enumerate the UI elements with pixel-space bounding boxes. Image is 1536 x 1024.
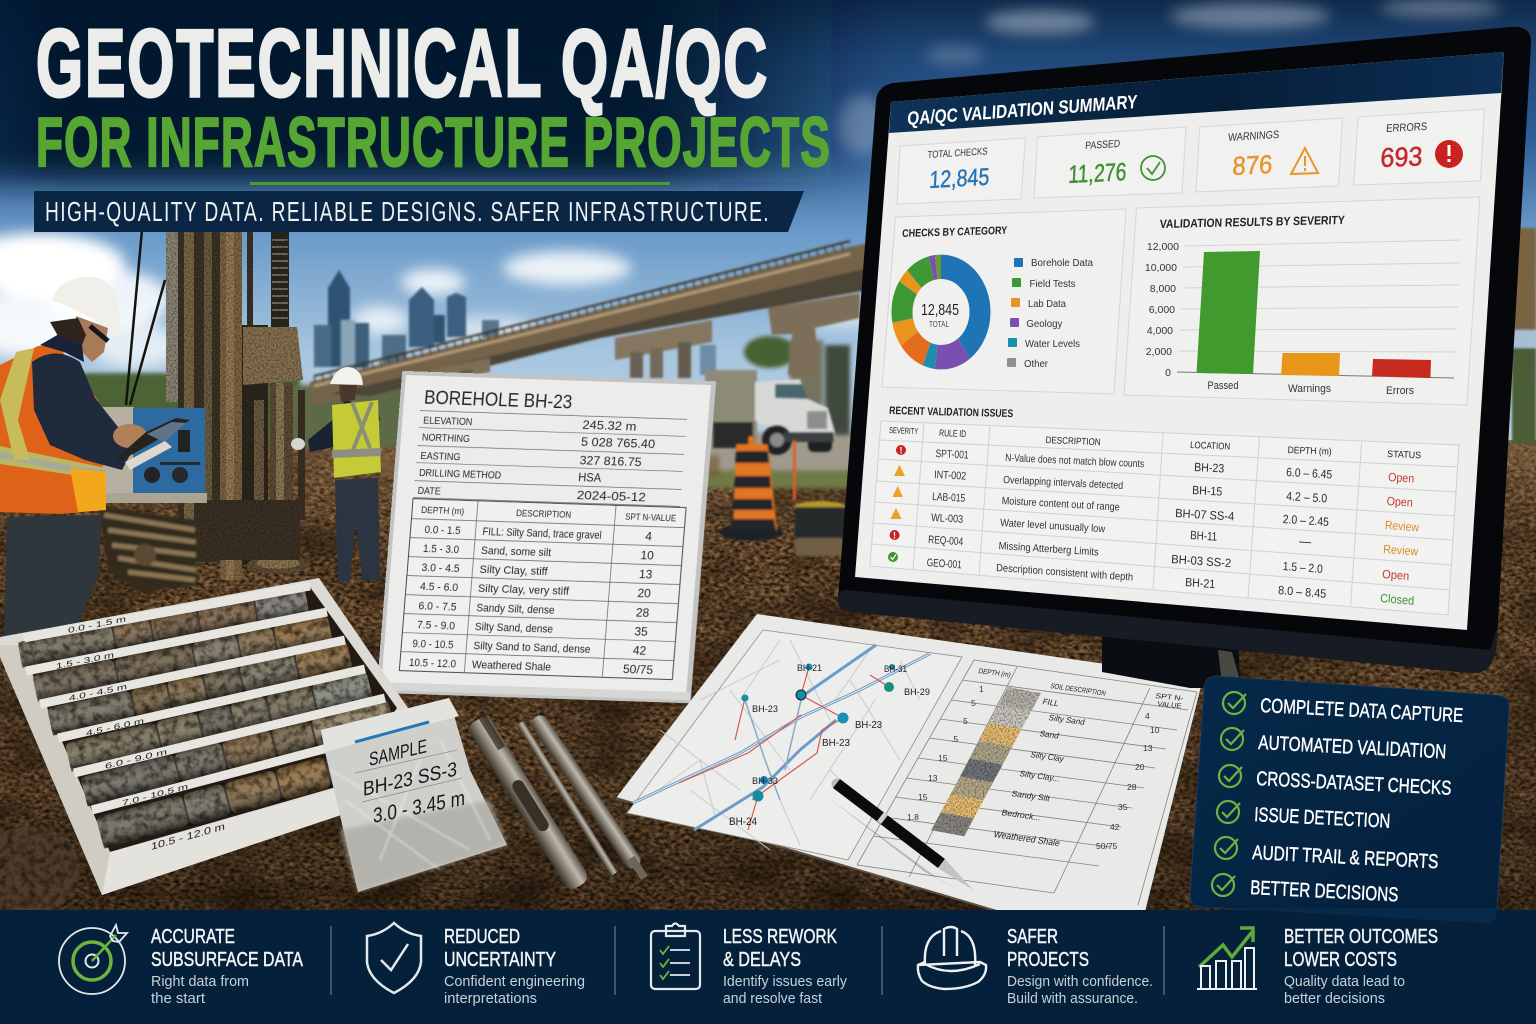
benefit: accurate subsurface data: Right data from bbox=[151, 973, 249, 990]
accent line bbox=[250, 182, 670, 185]
benefit: reduced uncertainty bbox=[367, 923, 585, 1007]
board metadata: EASTING bbox=[420, 450, 461, 463]
tray dividers with depth labels: 4.0 - 4.5 m bbox=[69, 682, 127, 703]
log sheet table: Sandy Silt bbox=[1010, 789, 1052, 803]
log sheet table: 4 bbox=[1145, 711, 1150, 721]
soil log table: 20 bbox=[637, 586, 652, 601]
soil log table bbox=[399, 499, 686, 680]
log sheet table: 10 bbox=[1150, 725, 1160, 735]
soil log table: 35 bbox=[634, 624, 649, 639]
site plan: BH-24 bbox=[729, 816, 757, 828]
benefit: less rework and delays bbox=[651, 924, 847, 1007]
site plan: BH-23 bbox=[855, 720, 882, 731]
benefit: accurate subsurface data: SUBSURFACE DATA bbox=[151, 949, 304, 971]
item: audit trail and reports: AUDIT TRAIL & REPORTS bbox=[1252, 842, 1439, 873]
locations: BH-03 SS-2 bbox=[1171, 552, 1232, 570]
whiteboard: borehole log bbox=[376, 371, 716, 703]
panel: validation results by severity: Errors bbox=[1386, 385, 1414, 397]
KPI card: passed: PASSED bbox=[1085, 138, 1121, 152]
soil log table: 9.0 - 10.5 bbox=[412, 638, 454, 651]
statuses: Open bbox=[1382, 567, 1410, 583]
soil log table: 7.5 - 9.0 bbox=[417, 619, 455, 632]
panel: checks by category: CHECKS BY CATEGORY bbox=[902, 225, 1008, 240]
KPI card: passed: 11,276 bbox=[1068, 158, 1127, 189]
title: FOR INFRASTRUCTURE PROJECTS bbox=[36, 103, 831, 181]
benefit: safer projects: Build with assurance. bbox=[1007, 990, 1138, 1007]
log sheet table: .5 bbox=[951, 734, 958, 744]
KPI card: warnings: 876 bbox=[1232, 149, 1273, 181]
item: issue detection bbox=[1217, 801, 1391, 833]
site map and log sheet bbox=[616, 614, 1203, 912]
board metadata: 2024-05-12 bbox=[576, 488, 647, 504]
rule ids: WL-003 bbox=[931, 512, 963, 526]
board metadata: 5 028 765.40 bbox=[580, 435, 656, 451]
axis labels: 8,000 bbox=[1150, 283, 1176, 295]
log sheet table: Silty Clay... bbox=[1018, 769, 1061, 784]
log sheet table: 1.8 bbox=[907, 812, 919, 822]
locations: BH-07 SS-4 bbox=[1175, 506, 1235, 524]
tablet bbox=[117, 418, 190, 470]
recent validation issues heading: RECENT VALIDATION ISSUES bbox=[889, 405, 1013, 420]
depths: — bbox=[1299, 534, 1313, 549]
crawler tracks bbox=[100, 507, 197, 592]
table header: LOCATION bbox=[1190, 440, 1231, 453]
screen bbox=[855, 52, 1504, 630]
monitor stand bbox=[1102, 630, 1240, 688]
tagline banner: HIGH-QUALITY DATA. RELIABLE DESIGNS. SAFER INFRASTRUCTURE. bbox=[45, 196, 770, 227]
descriptions: N-Value does not match blow counts bbox=[1005, 452, 1144, 470]
table header: SEVERITY bbox=[889, 425, 919, 436]
vest bbox=[0, 345, 106, 514]
donut chart bbox=[902, 267, 980, 357]
strata column bbox=[931, 687, 1041, 836]
board metadata: HSA bbox=[578, 470, 602, 485]
item: audit trail and reports bbox=[1215, 837, 1439, 873]
rig mast bbox=[166, 192, 309, 580]
neck and face bbox=[76, 316, 108, 362]
tray dividers with depth labels: 6.0 - 9.0 m bbox=[105, 747, 167, 771]
log sheet table: Silty Clay bbox=[1029, 750, 1066, 764]
depths: 6.0 – 6.45 bbox=[1286, 465, 1333, 482]
site plan: BH-29 bbox=[904, 687, 930, 697]
table header: STATUS bbox=[1387, 449, 1421, 461]
statuses: Closed bbox=[1380, 591, 1415, 608]
soil log table: Sandy Silt, dense bbox=[476, 602, 555, 617]
board metadata: 245.32 m bbox=[582, 418, 637, 434]
log sheet table: 15 bbox=[918, 792, 928, 802]
donut legend: Field Tests bbox=[1030, 278, 1076, 290]
benefit: better outcomes, lower costs: Quality data lead to bbox=[1284, 973, 1405, 990]
control box bbox=[98, 407, 207, 503]
title bbox=[36, 10, 831, 181]
benefit: safer projects: SAFER bbox=[1007, 926, 1058, 948]
tray dividers with depth labels: 7.0 - 10.5 m bbox=[122, 782, 188, 808]
site plan: BH-21 bbox=[797, 663, 822, 673]
soil log table: 42 bbox=[632, 643, 647, 658]
donut legend: Other bbox=[1024, 358, 1048, 370]
soil log table: 0.0 - 1.5 bbox=[424, 524, 461, 537]
locations: BH-11 bbox=[1190, 528, 1218, 544]
icon: hard hat bbox=[918, 927, 986, 989]
axis labels: 2,000 bbox=[1146, 346, 1172, 358]
title: GEOTECHNICAL QA/QC bbox=[36, 10, 769, 117]
locations bbox=[1171, 460, 1235, 591]
statuses: Review bbox=[1385, 518, 1420, 534]
soil log table: 13 bbox=[638, 567, 653, 582]
panel: checks by category: 12,845 bbox=[921, 302, 959, 319]
axis labels: 6,000 bbox=[1149, 304, 1175, 316]
benefit: better outcomes, lower costs: LOWER COSTS bbox=[1284, 949, 1397, 971]
locations: BH-15 bbox=[1192, 483, 1223, 499]
depths: 2.0 – 2.45 bbox=[1282, 512, 1329, 529]
item: better decisions: BETTER DECISIONS bbox=[1250, 877, 1399, 906]
log sheet table: VALUE bbox=[1157, 700, 1182, 710]
bridge bbox=[310, 228, 1536, 444]
tray dividers with depth labels: 0.0 - 1.5 m bbox=[68, 614, 126, 635]
soil log table: 10.5 - 12.0 bbox=[408, 657, 456, 670]
bars bbox=[1196, 251, 1260, 374]
sample bag bbox=[321, 698, 507, 892]
benefit: accurate subsurface data: ACCURATE bbox=[151, 926, 235, 948]
item: issue detection: ISSUE DETECTION bbox=[1254, 804, 1391, 833]
soil log table: SPT N-VALUE bbox=[625, 512, 677, 524]
descriptions: Description consistent with depth bbox=[996, 562, 1134, 584]
depths bbox=[1278, 465, 1333, 601]
soil log table: 4 bbox=[645, 529, 653, 544]
log sheet table: 35 bbox=[1118, 802, 1128, 812]
soil log table: Silty Sand, dense bbox=[475, 621, 553, 636]
background sky bbox=[0, 0, 1536, 470]
soil log table: Sand, some silt bbox=[481, 545, 552, 559]
soil log table: 10 bbox=[640, 548, 655, 563]
statuses bbox=[1380, 470, 1420, 608]
soil log table: Silty Clay, stiff bbox=[479, 564, 549, 578]
panel: checks by category bbox=[882, 209, 1126, 394]
log sheet table: SPT N- bbox=[1155, 692, 1185, 703]
soil log table: DEPTH (m) bbox=[421, 505, 465, 517]
table header bbox=[889, 425, 1421, 461]
locations: BH-21 bbox=[1185, 575, 1216, 591]
bezel bbox=[838, 27, 1531, 673]
rule ids: INT-002 bbox=[934, 469, 966, 483]
item: better decisions bbox=[1212, 874, 1399, 906]
benefit: reduced uncertainty: interpretations bbox=[444, 990, 537, 1007]
KPI card: warnings bbox=[1196, 118, 1342, 192]
descriptions: Missing Atterberg Limits bbox=[998, 540, 1099, 558]
item: cross-dataset checks bbox=[1219, 765, 1452, 800]
axis labels: 10,000 bbox=[1145, 262, 1177, 274]
icon: shield bbox=[367, 923, 421, 993]
table header: DEPTH (m) bbox=[1287, 445, 1332, 458]
benefit: less rework and delays: and resolve fast bbox=[723, 990, 823, 1007]
benefit: better outcomes, lower costs: BETTER OUTCOMES bbox=[1284, 926, 1438, 948]
descriptions: Overlapping intervals detected bbox=[1003, 474, 1124, 492]
KPI card: total checks: TOTAL CHECKS bbox=[927, 146, 988, 161]
table header: DESCRIPTION bbox=[1045, 435, 1101, 448]
benefit: reduced uncertainty: Confident engineering bbox=[444, 973, 585, 990]
footer bar bbox=[0, 907, 1536, 1024]
log sheet table: 5 bbox=[963, 716, 968, 726]
benefit: safer projects bbox=[918, 926, 1153, 1007]
trousers bbox=[4, 515, 102, 640]
axis labels: 12,000 bbox=[1147, 241, 1179, 253]
panel: validation results by severity: Passed bbox=[1208, 380, 1238, 392]
board title: BOREHOLE BH-23 bbox=[423, 388, 573, 414]
axis labels: 4,000 bbox=[1147, 325, 1173, 337]
panel: validation results by severity: Warnings bbox=[1288, 383, 1331, 395]
donut legend: Water Levels bbox=[1025, 338, 1080, 350]
soil log table: FILL: Silty Sand, trace gravel bbox=[482, 526, 602, 542]
log sheet table: DEPTH (m) bbox=[977, 667, 1012, 679]
sample bag: 3.0 - 3.45 m bbox=[373, 787, 465, 828]
board metadata: DRILLING METHOD bbox=[419, 467, 502, 481]
panel: validation results by severity bbox=[1124, 197, 1480, 405]
table header: RULE ID bbox=[939, 428, 966, 440]
tray dividers with depth labels: 1.5 - 3.0 m bbox=[56, 650, 114, 671]
KPI card: total checks: 12,845 bbox=[929, 164, 990, 194]
site plan: BH-31 bbox=[884, 664, 907, 674]
traffic cone bbox=[719, 436, 796, 541]
log sheet table: Silty Sand bbox=[1047, 713, 1086, 727]
monitor bbox=[838, 27, 1531, 673]
descriptions: Water level unusually low bbox=[1000, 517, 1106, 535]
header bar bbox=[889, 52, 1504, 133]
board metadata: ELEVATION bbox=[423, 415, 473, 428]
core rows bbox=[18, 588, 395, 848]
worker with tablet bbox=[0, 277, 190, 640]
soil log table: 28 bbox=[635, 605, 650, 620]
benefit: reduced uncertainty: UNCERTAINTY bbox=[444, 949, 556, 971]
donut legend: Geology bbox=[1026, 318, 1063, 330]
header bar: QA/QC VALIDATION SUMMARY bbox=[907, 92, 1138, 130]
board metadata bbox=[413, 411, 687, 506]
tray dividers with depth labels: 10.5 - 12.0 m bbox=[151, 821, 225, 853]
background worker bbox=[291, 367, 381, 583]
icon: clipboard checklist bbox=[651, 924, 700, 989]
soil log table: 4.5 - 6.0 bbox=[420, 581, 459, 594]
board metadata: NORTHING bbox=[421, 432, 470, 445]
benefit: accurate subsurface data bbox=[59, 925, 304, 1007]
soil log table: 6.0 - 7.5 bbox=[418, 600, 457, 613]
locations: BH-23 bbox=[1194, 460, 1225, 476]
sleeve bbox=[32, 354, 130, 470]
KPI card: passed bbox=[1034, 127, 1186, 198]
board metadata: 327 816.75 bbox=[579, 453, 642, 469]
log sheet table: 13 bbox=[928, 773, 938, 783]
hand bbox=[113, 424, 147, 448]
donut legend: Borehole Data bbox=[1031, 257, 1093, 269]
white helmet bbox=[52, 277, 122, 338]
skyline bbox=[314, 270, 716, 375]
log sheet table: 20 bbox=[1135, 762, 1145, 772]
drill rig bbox=[98, 192, 309, 592]
soil log table: 50/75 bbox=[622, 662, 654, 677]
sample bag: SAMPLE bbox=[369, 736, 427, 771]
KPI card: errors bbox=[1354, 109, 1484, 185]
hydraulic hose lines bbox=[126, 230, 165, 405]
site plan: BH-33 bbox=[752, 776, 778, 786]
log sheet table: SOIL DESCRIPTION bbox=[1049, 682, 1107, 698]
split spoon sampler tools bbox=[464, 711, 651, 892]
depths: 4.2 – 5.0 bbox=[1286, 489, 1328, 505]
descriptions bbox=[996, 452, 1144, 584]
bucket bbox=[794, 501, 846, 556]
KPI card: total checks bbox=[897, 138, 1026, 204]
tray dividers with depth labels bbox=[24, 586, 400, 853]
core tray bbox=[0, 578, 408, 895]
pen bbox=[826, 778, 973, 894]
log sheet table: 15 bbox=[938, 753, 948, 763]
log sheet table bbox=[857, 660, 1197, 905]
log sheet table: Weathered Shale bbox=[992, 829, 1061, 848]
soil log table: Weathered Shale bbox=[471, 659, 551, 674]
rule ids: SPT-001 bbox=[935, 448, 969, 462]
statuses: Open bbox=[1386, 494, 1413, 510]
soil log table: DESCRIPTION bbox=[516, 508, 572, 521]
axis labels bbox=[1145, 241, 1179, 379]
log sheet table: 13 bbox=[1143, 743, 1153, 753]
benefit: safer projects: PROJECTS bbox=[1007, 949, 1089, 971]
icon: rising bar chart bbox=[1197, 928, 1257, 989]
statuses: Review bbox=[1383, 542, 1419, 559]
axis labels: 0 bbox=[1165, 367, 1171, 379]
donut legend: Lab Data bbox=[1028, 298, 1066, 310]
item: complete data capture bbox=[1223, 692, 1464, 727]
rule ids bbox=[926, 448, 969, 571]
benefit: reduced uncertainty: REDUCED bbox=[444, 926, 520, 948]
log sheet table: Bedrock... bbox=[1000, 808, 1042, 822]
site plan: BH-23 bbox=[752, 704, 778, 714]
soil log table: Silty Clay, very stiff bbox=[478, 583, 570, 598]
rule ids: REQ-004 bbox=[928, 534, 963, 548]
site plan bbox=[627, 630, 962, 860]
truck bbox=[705, 370, 835, 455]
log sheet table: 5 bbox=[971, 698, 976, 708]
KPI card: errors: 693 bbox=[1380, 141, 1423, 173]
icon: target bbox=[59, 925, 127, 994]
tagline banner bbox=[34, 191, 804, 232]
statuses: Open bbox=[1388, 470, 1415, 486]
log sheet table: 28 bbox=[1127, 782, 1137, 792]
rule ids: GEO-001 bbox=[926, 557, 962, 571]
benefit: better outcomes, lower costs: better decisions bbox=[1284, 990, 1385, 1007]
ground bbox=[0, 336, 1536, 920]
issues table bbox=[870, 421, 1459, 615]
site plan: BH-23 bbox=[822, 738, 850, 749]
tray dividers with depth labels: 4.5 - 6.0 m bbox=[86, 716, 144, 738]
KPI card: errors: ERRORS bbox=[1386, 121, 1427, 135]
donut legend bbox=[1007, 257, 1093, 370]
row icons: ! bbox=[900, 446, 902, 456]
descriptions: Moisture content out of range bbox=[1001, 495, 1120, 513]
row icons: ! bbox=[893, 530, 896, 540]
panel: validation results by severity: VALIDATION RESULTS BY SEVERITY bbox=[1159, 213, 1345, 231]
checklist panel bbox=[1190, 676, 1509, 923]
title backdrop bbox=[0, 0, 890, 182]
item: automated validation bbox=[1221, 728, 1447, 763]
benefit: less rework and delays: Identify issues early bbox=[723, 973, 847, 990]
depths: 8.0 – 8.45 bbox=[1278, 583, 1327, 601]
KPI card: warnings: WARNINGS bbox=[1228, 129, 1279, 144]
panel: checks by category: TOTAL bbox=[929, 319, 949, 329]
log sheet table: Sand bbox=[1038, 729, 1060, 741]
item: cross-dataset checks: CROSS-DATASET CHECKS bbox=[1256, 768, 1452, 800]
depths: 1.5 – 2.0 bbox=[1282, 559, 1323, 576]
row icons bbox=[888, 445, 906, 562]
benefit: better outcomes, lower costs bbox=[1197, 926, 1438, 1007]
soil log table: 3.0 - 4.5 bbox=[421, 562, 460, 575]
benefit: less rework and delays: & DELAYS bbox=[723, 949, 801, 971]
benefit: less rework and delays: LESS REWORK bbox=[723, 926, 838, 948]
benefit: safer projects: Design with confidence. bbox=[1007, 973, 1153, 990]
sample bag: BH-23 SS-3 bbox=[363, 759, 457, 801]
log sheet table: 50/75 bbox=[1096, 841, 1118, 851]
board metadata: DATE bbox=[417, 485, 441, 497]
benefit: accurate subsurface data: the start bbox=[151, 990, 206, 1007]
item: automated validation: AUTOMATED VALIDATION bbox=[1258, 732, 1447, 763]
rule ids: LAB-015 bbox=[932, 491, 965, 505]
soil log table: 1.5 - 3.0 bbox=[423, 543, 460, 556]
item: complete data capture: COMPLETE DATA CAPTURE bbox=[1260, 695, 1464, 727]
log sheet table: FILL bbox=[1041, 697, 1060, 708]
log sheet table: 1 bbox=[979, 684, 984, 694]
soil log table: Silty Sand to Sand, dense bbox=[473, 640, 591, 656]
log sheet table: 42 bbox=[1110, 822, 1120, 832]
